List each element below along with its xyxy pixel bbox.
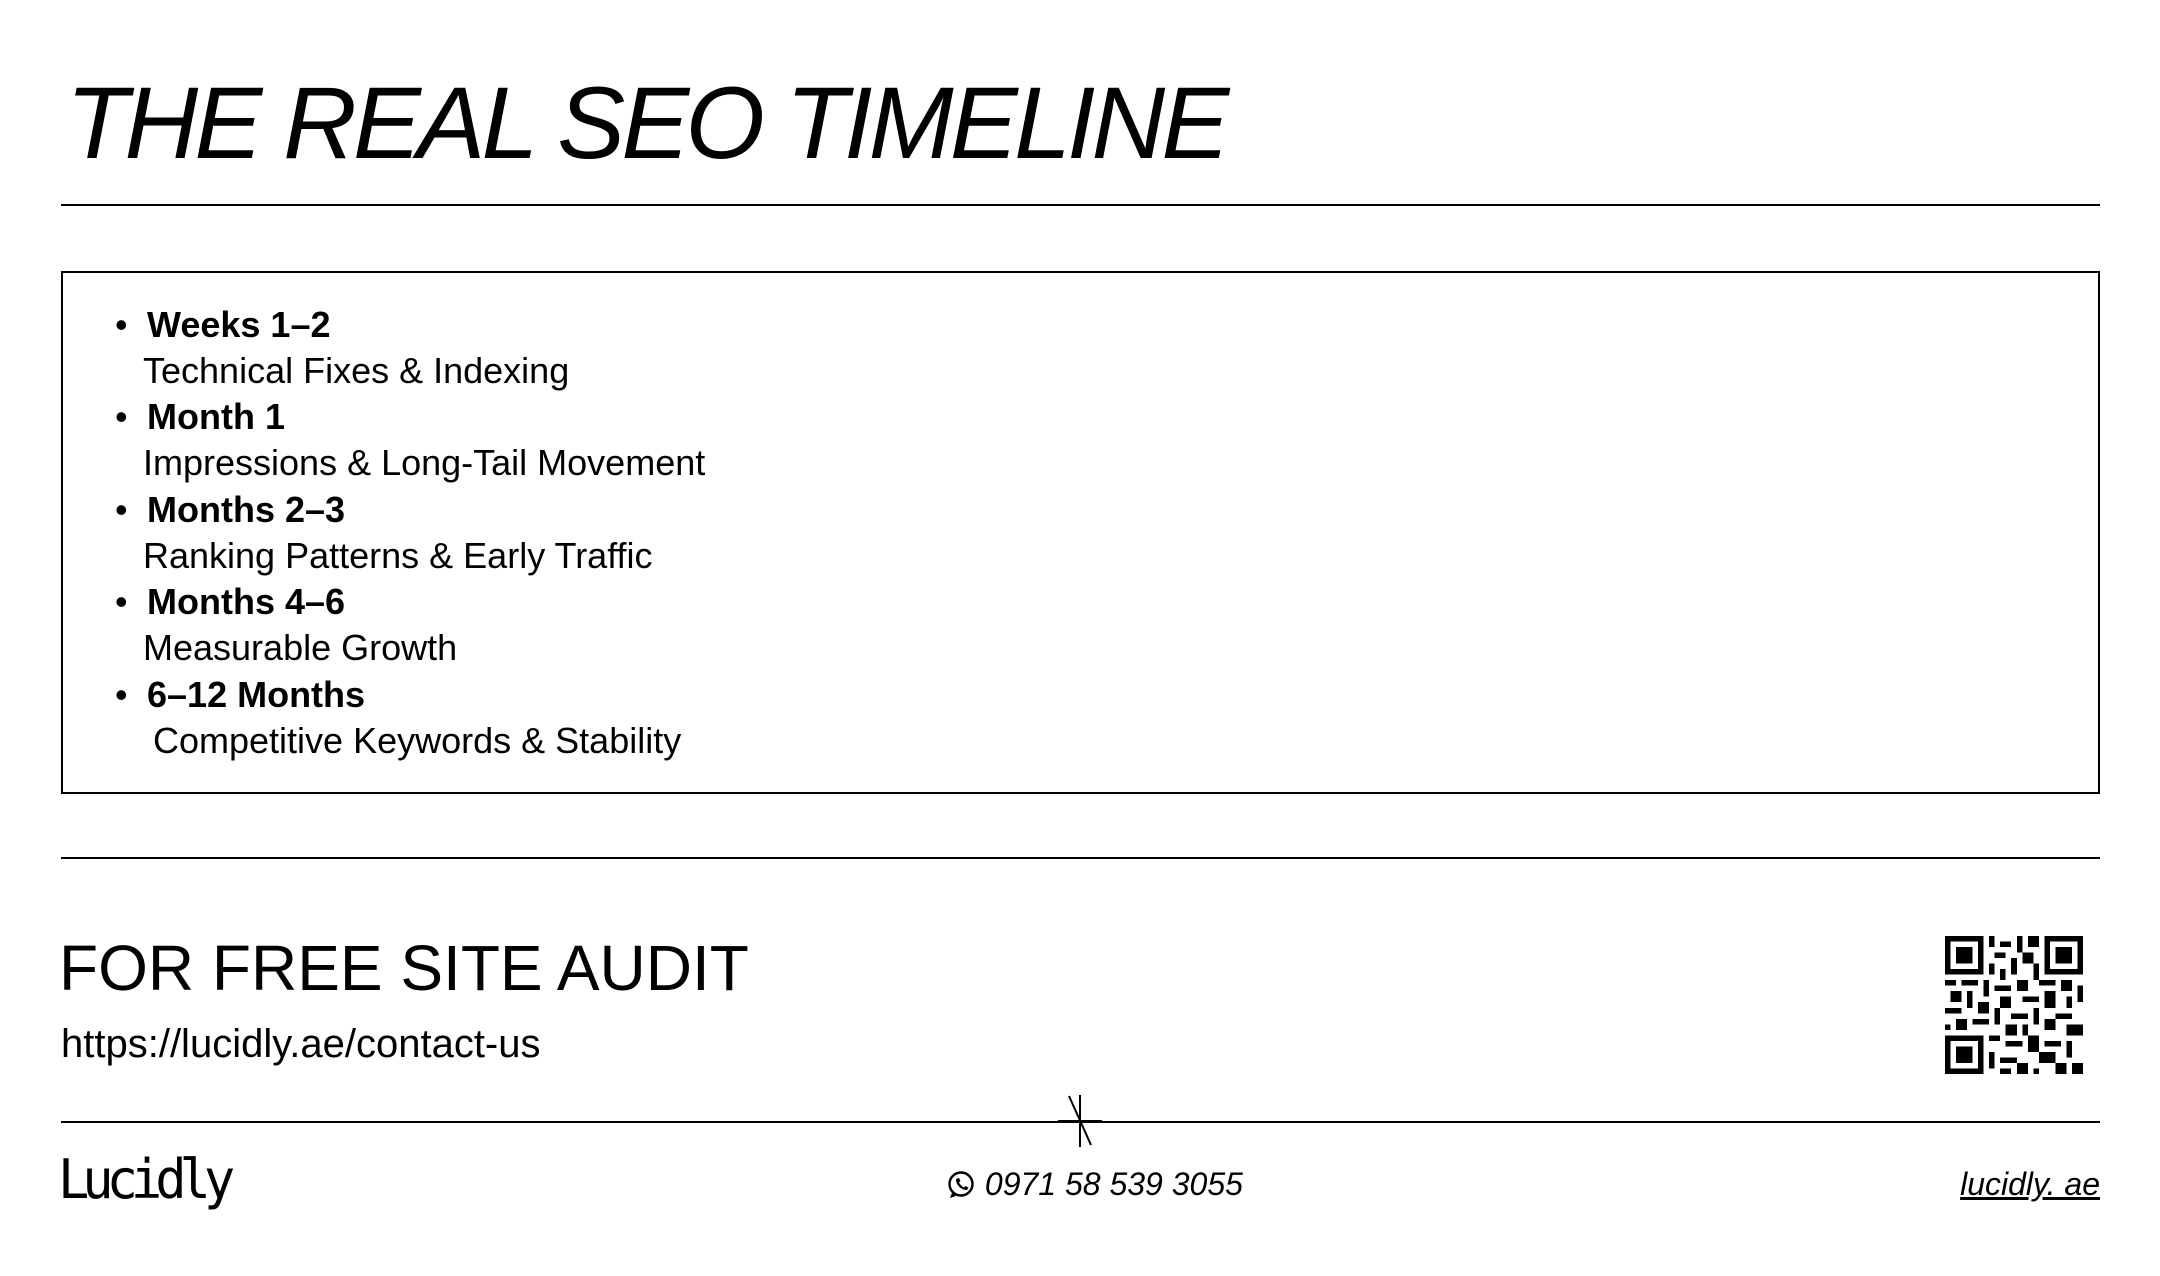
item: weeks 1-2 [115,304,569,391]
item: months 2-3: Months 2–3 [147,489,345,530]
icon: star mark [1058,1095,1102,1147]
item: months 2-3: Ranking Patterns & Early Traffic [143,535,653,576]
item: months 2-3: • [115,489,128,530]
item: months 4-6: • [115,581,128,622]
item: month 1 [115,396,705,483]
heading: free site audit: FOR FREE SITE AUDIT [59,932,749,1004]
item: weeks 1-2: Weeks 1–2 [147,304,330,345]
item: month 1: Month 1 [147,396,285,437]
item: weeks 1-2: • [115,304,128,345]
item: 6-12 months: 6–12 Months [147,674,365,715]
panel: timeline list [61,271,2100,794]
link: website: lucidly. ae [1960,1166,2100,1202]
icon: whatsapp [948,1171,974,1198]
item: 6-12 months: • [115,674,128,715]
item: 6-12 months: Competitive Keywords & Stability [153,720,681,761]
item: month 1: • [115,396,128,437]
logo: Lucidly: Lucidly [58,1148,228,1212]
item: months 4-6 [115,581,457,668]
item: 6-12 months [115,674,682,761]
item: month 1: Impressions & Long-Tail Movement [143,442,705,483]
icon: QR code [1945,936,2083,1074]
item: months 4-6: Months 4–6 [147,581,345,622]
item: months 2-3 [115,489,653,576]
item: months 4-6: Measurable Growth [143,627,457,668]
text: url: https://lucidly.ae/contact-us [61,1022,540,1066]
title: THE REAL SEO TIMELINE [66,66,1226,180]
item: weeks 1-2: Technical Fixes & Indexing [143,350,569,391]
contact: phone: 0971 58 539 3055 [985,1166,1243,1202]
